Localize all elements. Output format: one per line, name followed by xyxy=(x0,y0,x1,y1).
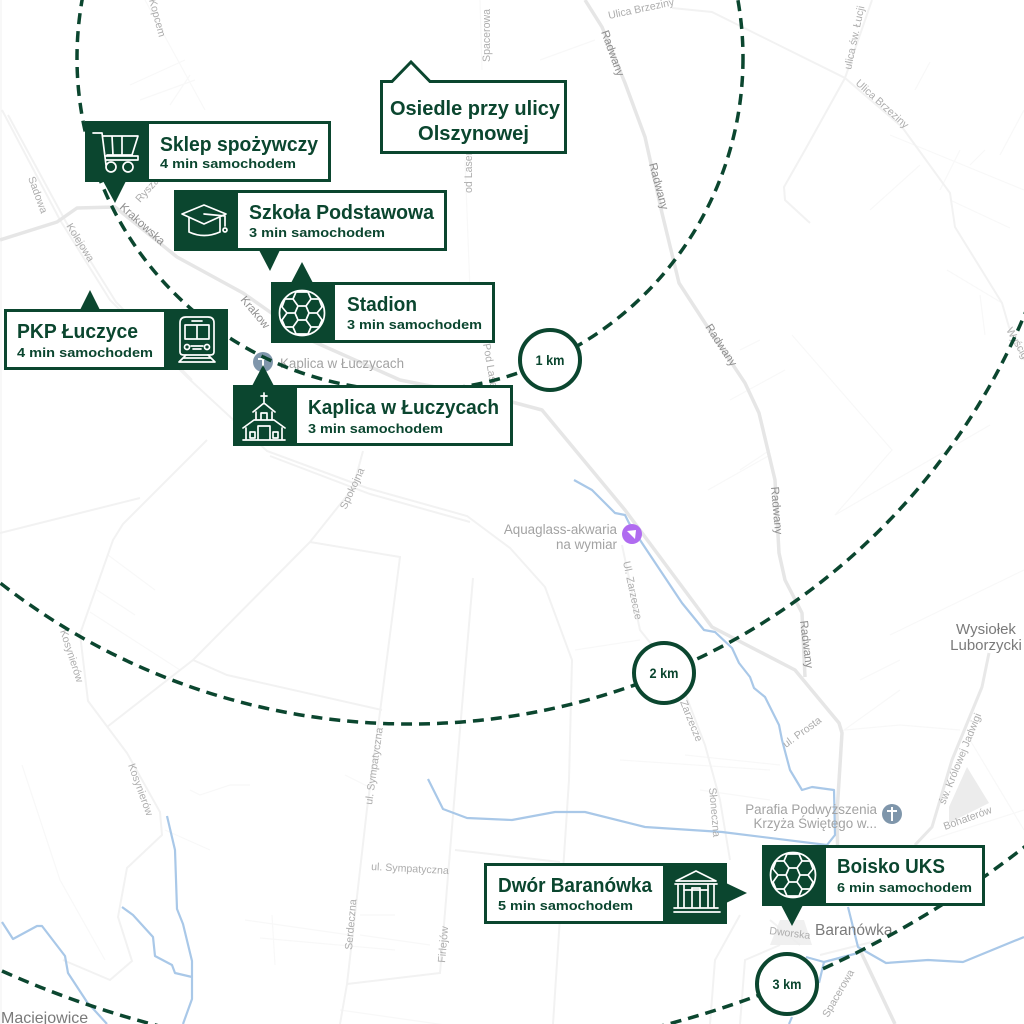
icon: train xyxy=(179,317,215,362)
icon: football xyxy=(280,290,324,336)
icon: chapel map pin xyxy=(253,352,273,372)
icon: football xyxy=(770,852,816,898)
map labels: Słoneczna xyxy=(706,787,722,838)
badge: 2 km: 2 km xyxy=(650,665,678,681)
map labels: Ryszard xyxy=(133,168,168,205)
map labels: Baranówka xyxy=(815,922,893,939)
badge: 2 km xyxy=(634,643,694,703)
map labels: Ulica Brzeziny xyxy=(853,77,911,132)
callout: PKP Łuczyce: PKP Łuczyce xyxy=(17,321,138,343)
map labels: Wysiołek xyxy=(956,621,1016,638)
callout: Kaplica w Łuczycach: Kaplica w Łuczycach xyxy=(308,397,499,419)
map labels: Dworska xyxy=(769,925,811,942)
icon: parish map pin xyxy=(882,804,902,824)
callout: PKP Łuczyce xyxy=(6,290,228,370)
map labels: Krakow xyxy=(238,294,272,332)
callout: Szkoła Podstawowa: 3 min samochodem xyxy=(249,225,385,240)
map labels: Radwany xyxy=(646,162,670,211)
callout: Kaplica w Łuczycach: 3 min samochodem xyxy=(308,421,443,436)
map labels: Kosynierów xyxy=(57,628,86,684)
badge: 3 km xyxy=(757,954,817,1014)
map labels: Pod Lasem xyxy=(480,342,501,397)
callout: Sklep spożywczy: Sklep spożywczy xyxy=(160,134,319,156)
map labels: św. Królowej Jadwigi xyxy=(937,712,984,806)
map labels: Luborzycki xyxy=(950,637,1022,654)
callout: Stadion: Stadion xyxy=(347,294,417,316)
icon: graduation cap xyxy=(182,205,227,236)
callout: Sklep spożywczy: 4 min samochodem xyxy=(160,156,296,171)
map labels: Aquaglass-akwaria xyxy=(504,522,618,537)
map labels: Radwany xyxy=(598,29,626,78)
map labels: Sadowa xyxy=(25,175,50,215)
callout: Osiedle przy ulicy Olszynowej: Olszynowej xyxy=(418,123,529,145)
map labels: ul. Prosta xyxy=(781,714,824,750)
callout: Osiedle przy ulicy Olszynowej xyxy=(382,62,566,152)
callout: Szkoła Podstawowa xyxy=(174,190,446,271)
callout: Szkoła Podstawowa: Szkoła Podstawowa xyxy=(249,202,435,224)
icon: shopping cart xyxy=(93,133,138,172)
map labels: Firlejów xyxy=(436,926,451,963)
map labels: Spokojna xyxy=(338,466,367,511)
badge: 1 km xyxy=(520,330,580,390)
map labels: Ul. Zarzecze xyxy=(620,560,644,621)
map labels: Radwany xyxy=(702,322,739,369)
icon: manor house xyxy=(674,871,720,912)
callout: Stadion xyxy=(271,262,494,343)
callout: Stadion: 3 min samochodem xyxy=(347,317,482,332)
callout: Sklep spożywczy xyxy=(85,121,330,203)
callout: Boisko UKS: 6 min samochodem xyxy=(837,880,972,895)
map labels: Spacerowa xyxy=(820,968,857,1020)
map labels: na wymiar xyxy=(556,537,618,552)
map labels: Serdeczna xyxy=(343,899,359,950)
callout: PKP Łuczyce: 4 min samochodem xyxy=(17,345,153,360)
map labels: Bohaterów xyxy=(942,804,994,833)
callout: Kaplica w Łuczycach xyxy=(233,365,512,446)
map labels: ul. Sympatyczna xyxy=(371,861,449,877)
icon: aquarium map pin xyxy=(622,524,642,544)
icon: chapel xyxy=(243,393,285,440)
map labels: Parafia Podwyższenia xyxy=(745,802,878,817)
map labels: od Lasem xyxy=(463,146,475,193)
map labels: ulica św. Łucji xyxy=(842,5,867,71)
map labels: ul. Sympatyczna xyxy=(363,727,386,805)
map labels: Kolejowa xyxy=(63,221,96,264)
badge: 3 km: 3 km xyxy=(772,976,802,992)
callout: Boisko UKS xyxy=(762,845,984,926)
callout: Dwór Baranówka xyxy=(486,863,747,924)
map labels: Kaplica w Łuczycach xyxy=(280,356,404,371)
radius circle 1 km xyxy=(77,0,743,391)
callout: Osiedle przy ulicy Olszynowej: Osiedle przy ulicy xyxy=(390,98,561,120)
map labels: Radwany xyxy=(768,486,784,535)
map labels: Spacerowa xyxy=(481,9,493,62)
map labels: Zarzecze xyxy=(677,699,705,744)
map labels: Krzyża Świętego w... xyxy=(753,816,877,831)
callout: Boisko UKS: Boisko UKS xyxy=(837,856,945,878)
badge: 1 km: 1 km xyxy=(536,352,564,368)
map labels: Radwany xyxy=(797,620,815,669)
callout: Dwór Baranówka: 5 min samochodem xyxy=(498,898,633,913)
callout: Dwór Baranówka: Dwór Baranówka xyxy=(498,875,653,897)
map labels: Krakowska xyxy=(117,201,167,248)
radius circle 2 km xyxy=(0,0,1024,724)
map labels: Kosynierów xyxy=(125,762,155,818)
